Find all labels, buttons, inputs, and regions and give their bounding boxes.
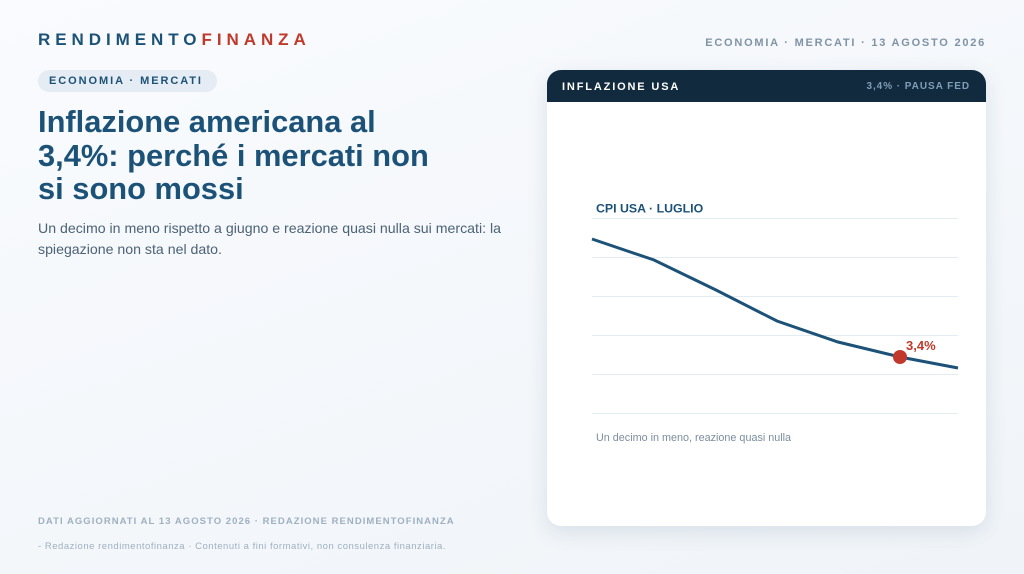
title xyxy=(38,104,429,206)
chart title: CPI USA · LUGLIO xyxy=(596,202,704,216)
title: si sono mossi xyxy=(38,171,244,206)
chart caption: Un decimo in meno, reazione quasi nulla xyxy=(596,432,791,444)
data line xyxy=(592,239,958,368)
title: 3,4%: perché i mercati non xyxy=(38,138,429,172)
subtitle: Un decimo in meno rispetto a giugno e reazione quasi nulla sui mercati: la xyxy=(38,220,501,236)
panel heading: INFLAZIONE USA xyxy=(562,81,680,93)
panel: chart card xyxy=(547,70,986,526)
panel header note: 3,4% · PAUSA FED xyxy=(866,80,970,92)
title: Inflazione americana al xyxy=(38,104,376,139)
header meta: ECONOMIA · MERCATI · 13 AGOSTO 2026 xyxy=(705,36,986,48)
footer disclaimer: - Redazione rendimentofinanza · Contenuti a fini formativi, non consulenza finanziaria. xyxy=(38,541,446,552)
logo: RENDIMENTOFINANZA xyxy=(38,30,311,49)
subtitle: spiegazione non sta nel dato. xyxy=(38,241,222,257)
category pill xyxy=(38,70,217,92)
category pill: ECONOMIA · MERCATI xyxy=(49,75,203,87)
highlighted point xyxy=(893,350,907,364)
point label: 3,4% xyxy=(906,338,936,353)
footer source line: DATI AGGIORNATI AL 13 AGOSTO 2026 · REDAZIONE RENDIMENTOFINANZA xyxy=(38,516,455,527)
panel header xyxy=(547,70,986,102)
subtitle xyxy=(38,220,501,257)
